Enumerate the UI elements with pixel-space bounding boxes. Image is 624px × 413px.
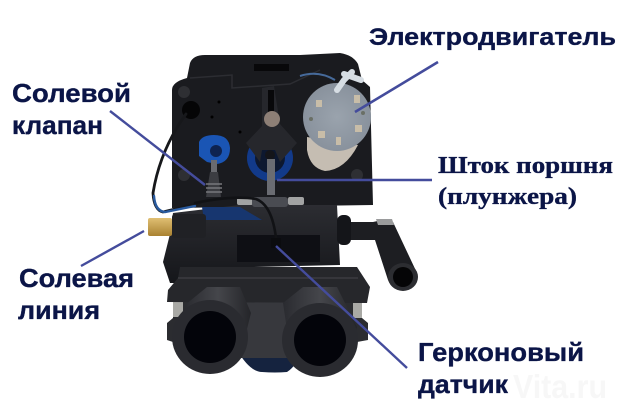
blue cap left: [199, 135, 230, 197]
watermark: Vita.ru: [513, 368, 607, 405]
right threaded port: [282, 287, 358, 377]
label: brine line: линия: [18, 295, 100, 325]
leader line: piston rod: [277, 179, 432, 181]
label: brine line: Солевая: [19, 263, 134, 293]
label: brine valve: Солевой: [12, 78, 131, 108]
label: reed sensor: датчик: [418, 369, 509, 399]
label: piston rod: Шток поршня: [438, 153, 613, 179]
leader line: brine valve: [110, 111, 205, 185]
label: piston rod: (плунжера): [438, 184, 577, 210]
leader line: reed sensor: [276, 246, 407, 368]
label: brine valve: клапан: [12, 110, 103, 140]
leader line: motor: [355, 62, 438, 112]
label: motor: Электродвигатель: [369, 24, 616, 51]
back panel: [172, 53, 373, 208]
label: reed sensor: Герконовый: [418, 337, 584, 367]
valve unit photo illustration: [148, 53, 418, 377]
left threaded port: [172, 287, 251, 374]
valve body: [163, 205, 340, 283]
bottom flange: [167, 267, 370, 303]
piston rod: [267, 159, 275, 195]
black and blue wires: [153, 114, 276, 238]
drain elbow: [337, 215, 418, 291]
rocker arm: [246, 86, 297, 162]
motor: [300, 72, 371, 171]
brass salt line fitting: [148, 214, 206, 238]
reed sensor block: [271, 238, 281, 248]
leader line: brine line: [81, 231, 144, 266]
lower housing: [167, 300, 368, 342]
blue ring center: [247, 135, 293, 181]
screws and socket: [178, 86, 363, 181]
